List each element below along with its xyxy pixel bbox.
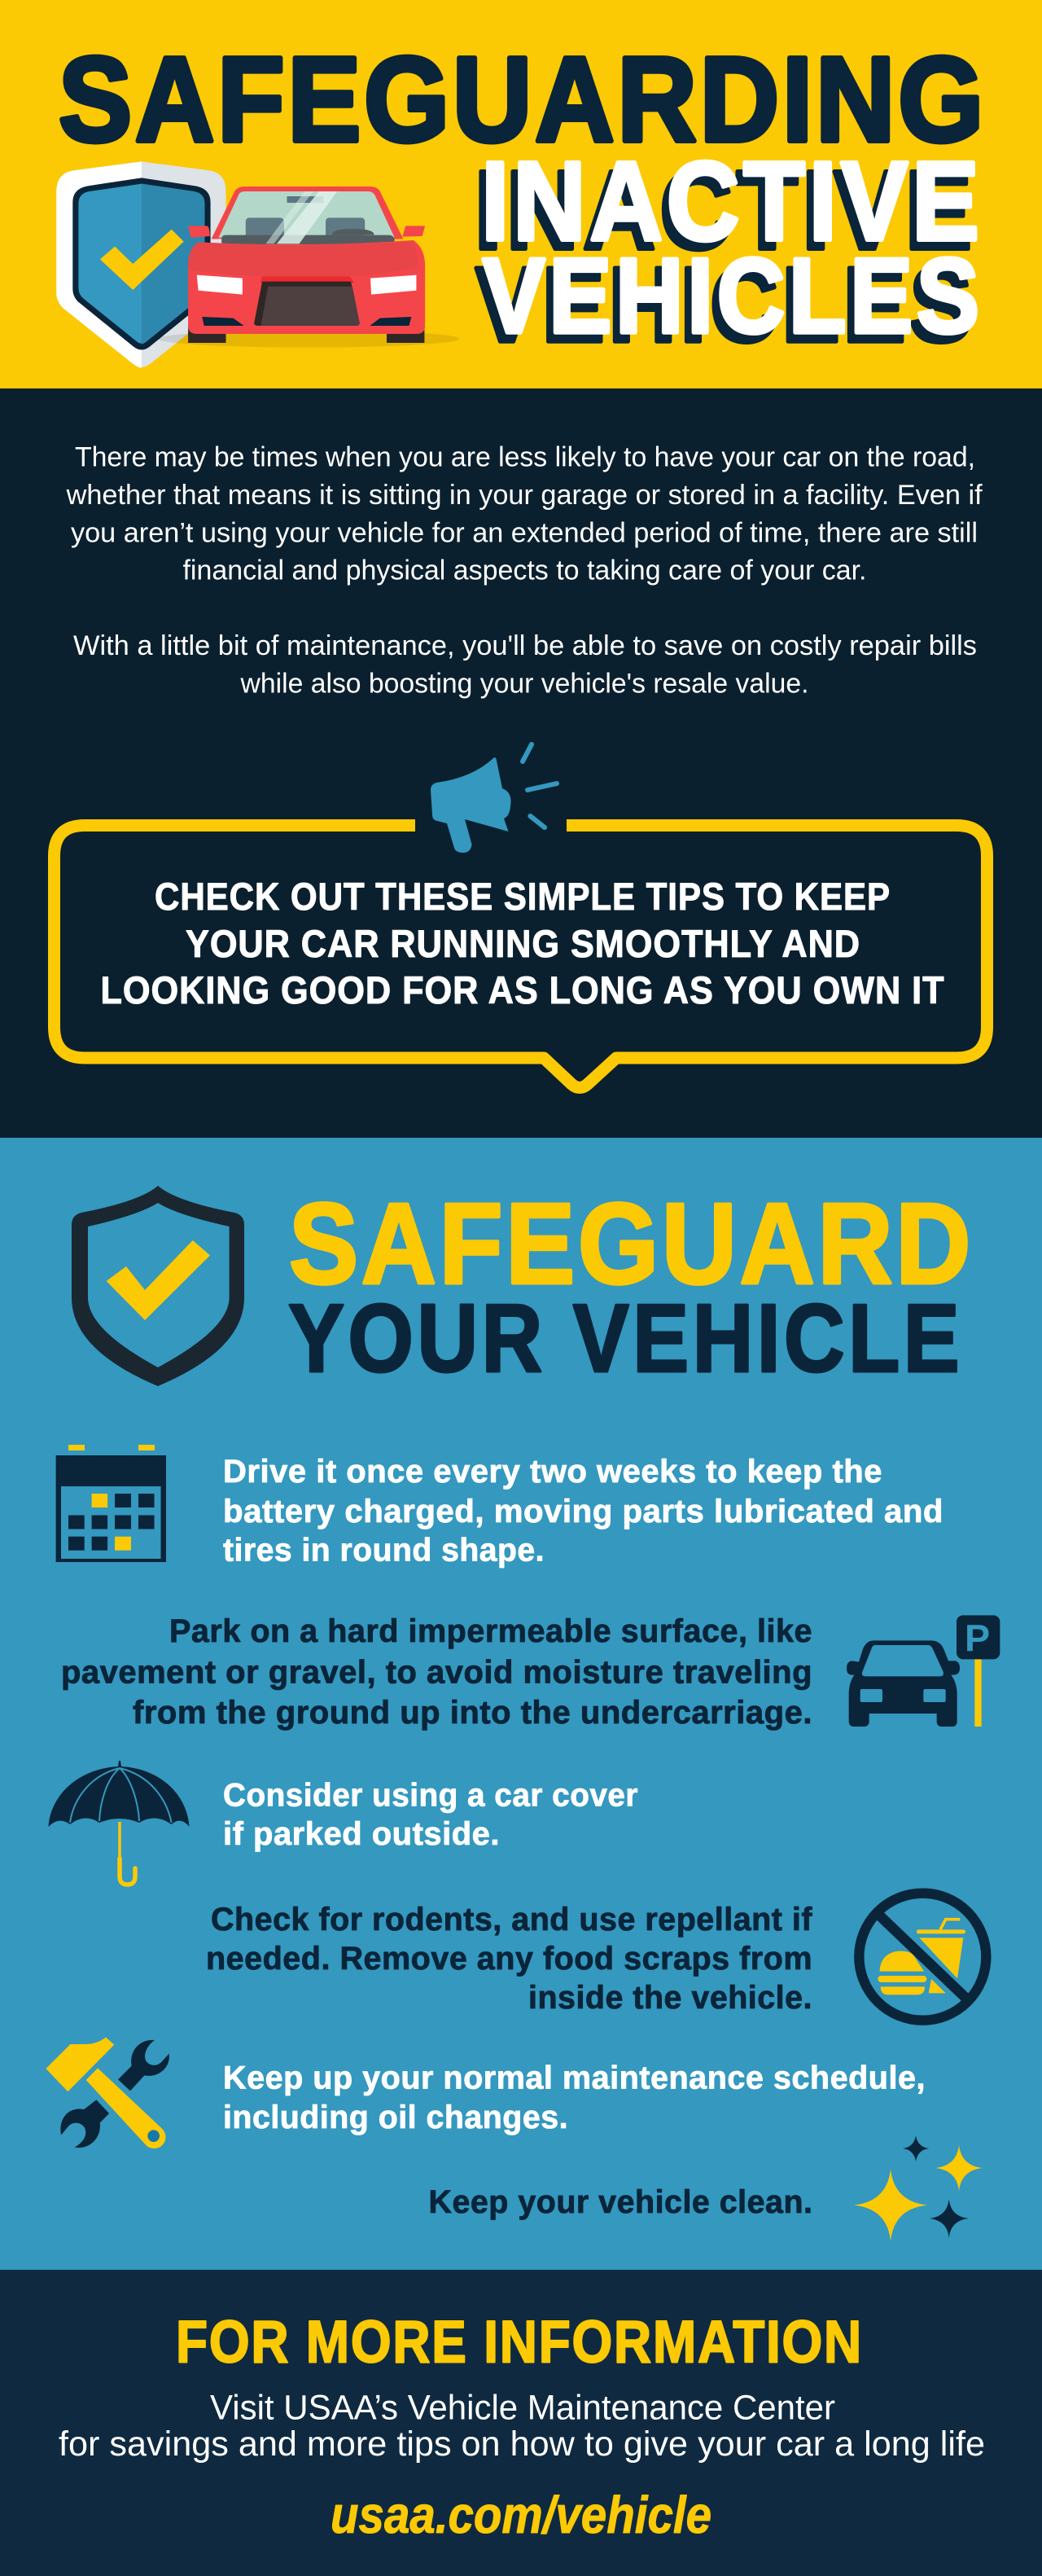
text block: visit usaa: for savings and more tips on how to give your car a long life: [59, 2425, 985, 2464]
callout text: YOUR CAR RUNNING SMOOTHLY AND: [186, 922, 860, 965]
panel: introduction: [0, 388, 1042, 1138]
tip: park on a hard surface: [61, 1613, 812, 1731]
text block: intro paragraph one: you aren’t using your vehicle for an extended period of time, there are still: [71, 518, 978, 549]
tip: park on a hard surface: pavement or gravel, to avoid moisture traveling: [61, 1655, 812, 1691]
tip: drive every two weeks: [223, 1454, 943, 1569]
icon: umbrella: [49, 1761, 190, 1885]
text block: intro paragraph two: With a little bit of maintenance, you'll be able to save on costly repair bills: [73, 630, 977, 661]
tip: drive every two weeks: Drive it once every two weeks to keep the: [223, 1454, 882, 1490]
title: inactive with shadow: INACTIVE: [474, 148, 976, 274]
tip: drive every two weeks: battery charged, moving parts lubricated and: [223, 1494, 943, 1529]
tip: maintenance schedule: including oil changes.: [223, 2100, 568, 2135]
tip: keep vehicle clean: Keep your vehicle clean.: [428, 2184, 812, 2220]
link: usaa.com/vehicle: usaa.com/vehicle: [331, 2486, 711, 2544]
tip: drive every two weeks: tires in round shape.: [223, 1533, 545, 1569]
tip: car cover: if parked outside.: [223, 1816, 500, 1852]
icon: calendar: [56, 1445, 166, 1562]
icon: outline shield with check: [72, 1186, 244, 1386]
icon: sparkles: [854, 2135, 983, 2241]
text block: intro paragraph one: whether that means it is sitting in your garage or stored in a facility. Even if: [66, 480, 983, 511]
icon: hammer and wrench: [46, 2038, 169, 2148]
callout text: LOOKING GOOD FOR AS LONG AS YOU OWN IT: [101, 968, 944, 1012]
icon: car and parking sign: P: [965, 1617, 990, 1659]
title: vehicles with shadow: VEHICLES: [482, 235, 983, 355]
tip: maintenance schedule: [223, 2060, 926, 2135]
panel: header: [0, 0, 1042, 388]
text block: intro paragraph two: while also boosting your vehicle's resale value.: [240, 669, 809, 700]
icon: red car: [158, 187, 459, 348]
text block: intro paragraph two: [73, 630, 977, 700]
heading: safeguard: SAFEGUARD: [289, 1179, 974, 1308]
callout text: [101, 875, 944, 1012]
tip: maintenance schedule: Keep up your normal maintenance schedule,: [223, 2060, 926, 2096]
title: inactive with shadow: INACTIVE: [481, 138, 983, 264]
icon: car and parking sign: [847, 1615, 1000, 1727]
tip: car cover: [223, 1778, 638, 1852]
tip: rodents and food scraps: needed. Remove any food scraps from: [206, 1941, 812, 1977]
tip: car cover: Consider using a car cover: [223, 1778, 638, 1814]
tip: rodents and food scraps: [206, 1902, 812, 2016]
callout text: CHECK OUT THESE SIMPLE TIPS TO KEEP: [155, 875, 891, 918]
tip: park on a hard surface: Park on a hard impermeable surface, like: [169, 1613, 812, 1649]
text block: intro paragraph one: There may be times when you are less likely to have your car on the road,: [75, 442, 975, 473]
text block: visit usaa: Visit USAA’s Vehicle Maintenance Center: [210, 2389, 835, 2428]
tip: rodents and food scraps: Check for rodents, and use repellant if: [211, 1902, 812, 1937]
text block: visit usaa: [59, 2389, 985, 2464]
heading: for more information: FOR MORE INFORMATION: [176, 2310, 863, 2375]
callout: speech bubble: [54, 826, 987, 1088]
panel: safeguard your vehicle: [0, 1138, 1042, 2270]
icon: shield with check: [56, 161, 225, 368]
title: vehicles with shadow: VEHICLES: [475, 244, 976, 364]
text block: intro paragraph one: financial and physical aspects to taking care of your car.: [182, 555, 866, 586]
icon: megaphone: [431, 744, 557, 853]
panel: footer: [0, 2270, 1042, 2576]
text block: intro paragraph one: [66, 442, 983, 586]
tip: rodents and food scraps: inside the vehicle.: [528, 1980, 812, 2016]
icon: no food: [859, 1894, 986, 2021]
heading: your vehicle: YOUR VEHICLE: [288, 1284, 963, 1393]
tip: park on a hard surface: from the ground up into the undercarriage.: [133, 1695, 812, 1731]
